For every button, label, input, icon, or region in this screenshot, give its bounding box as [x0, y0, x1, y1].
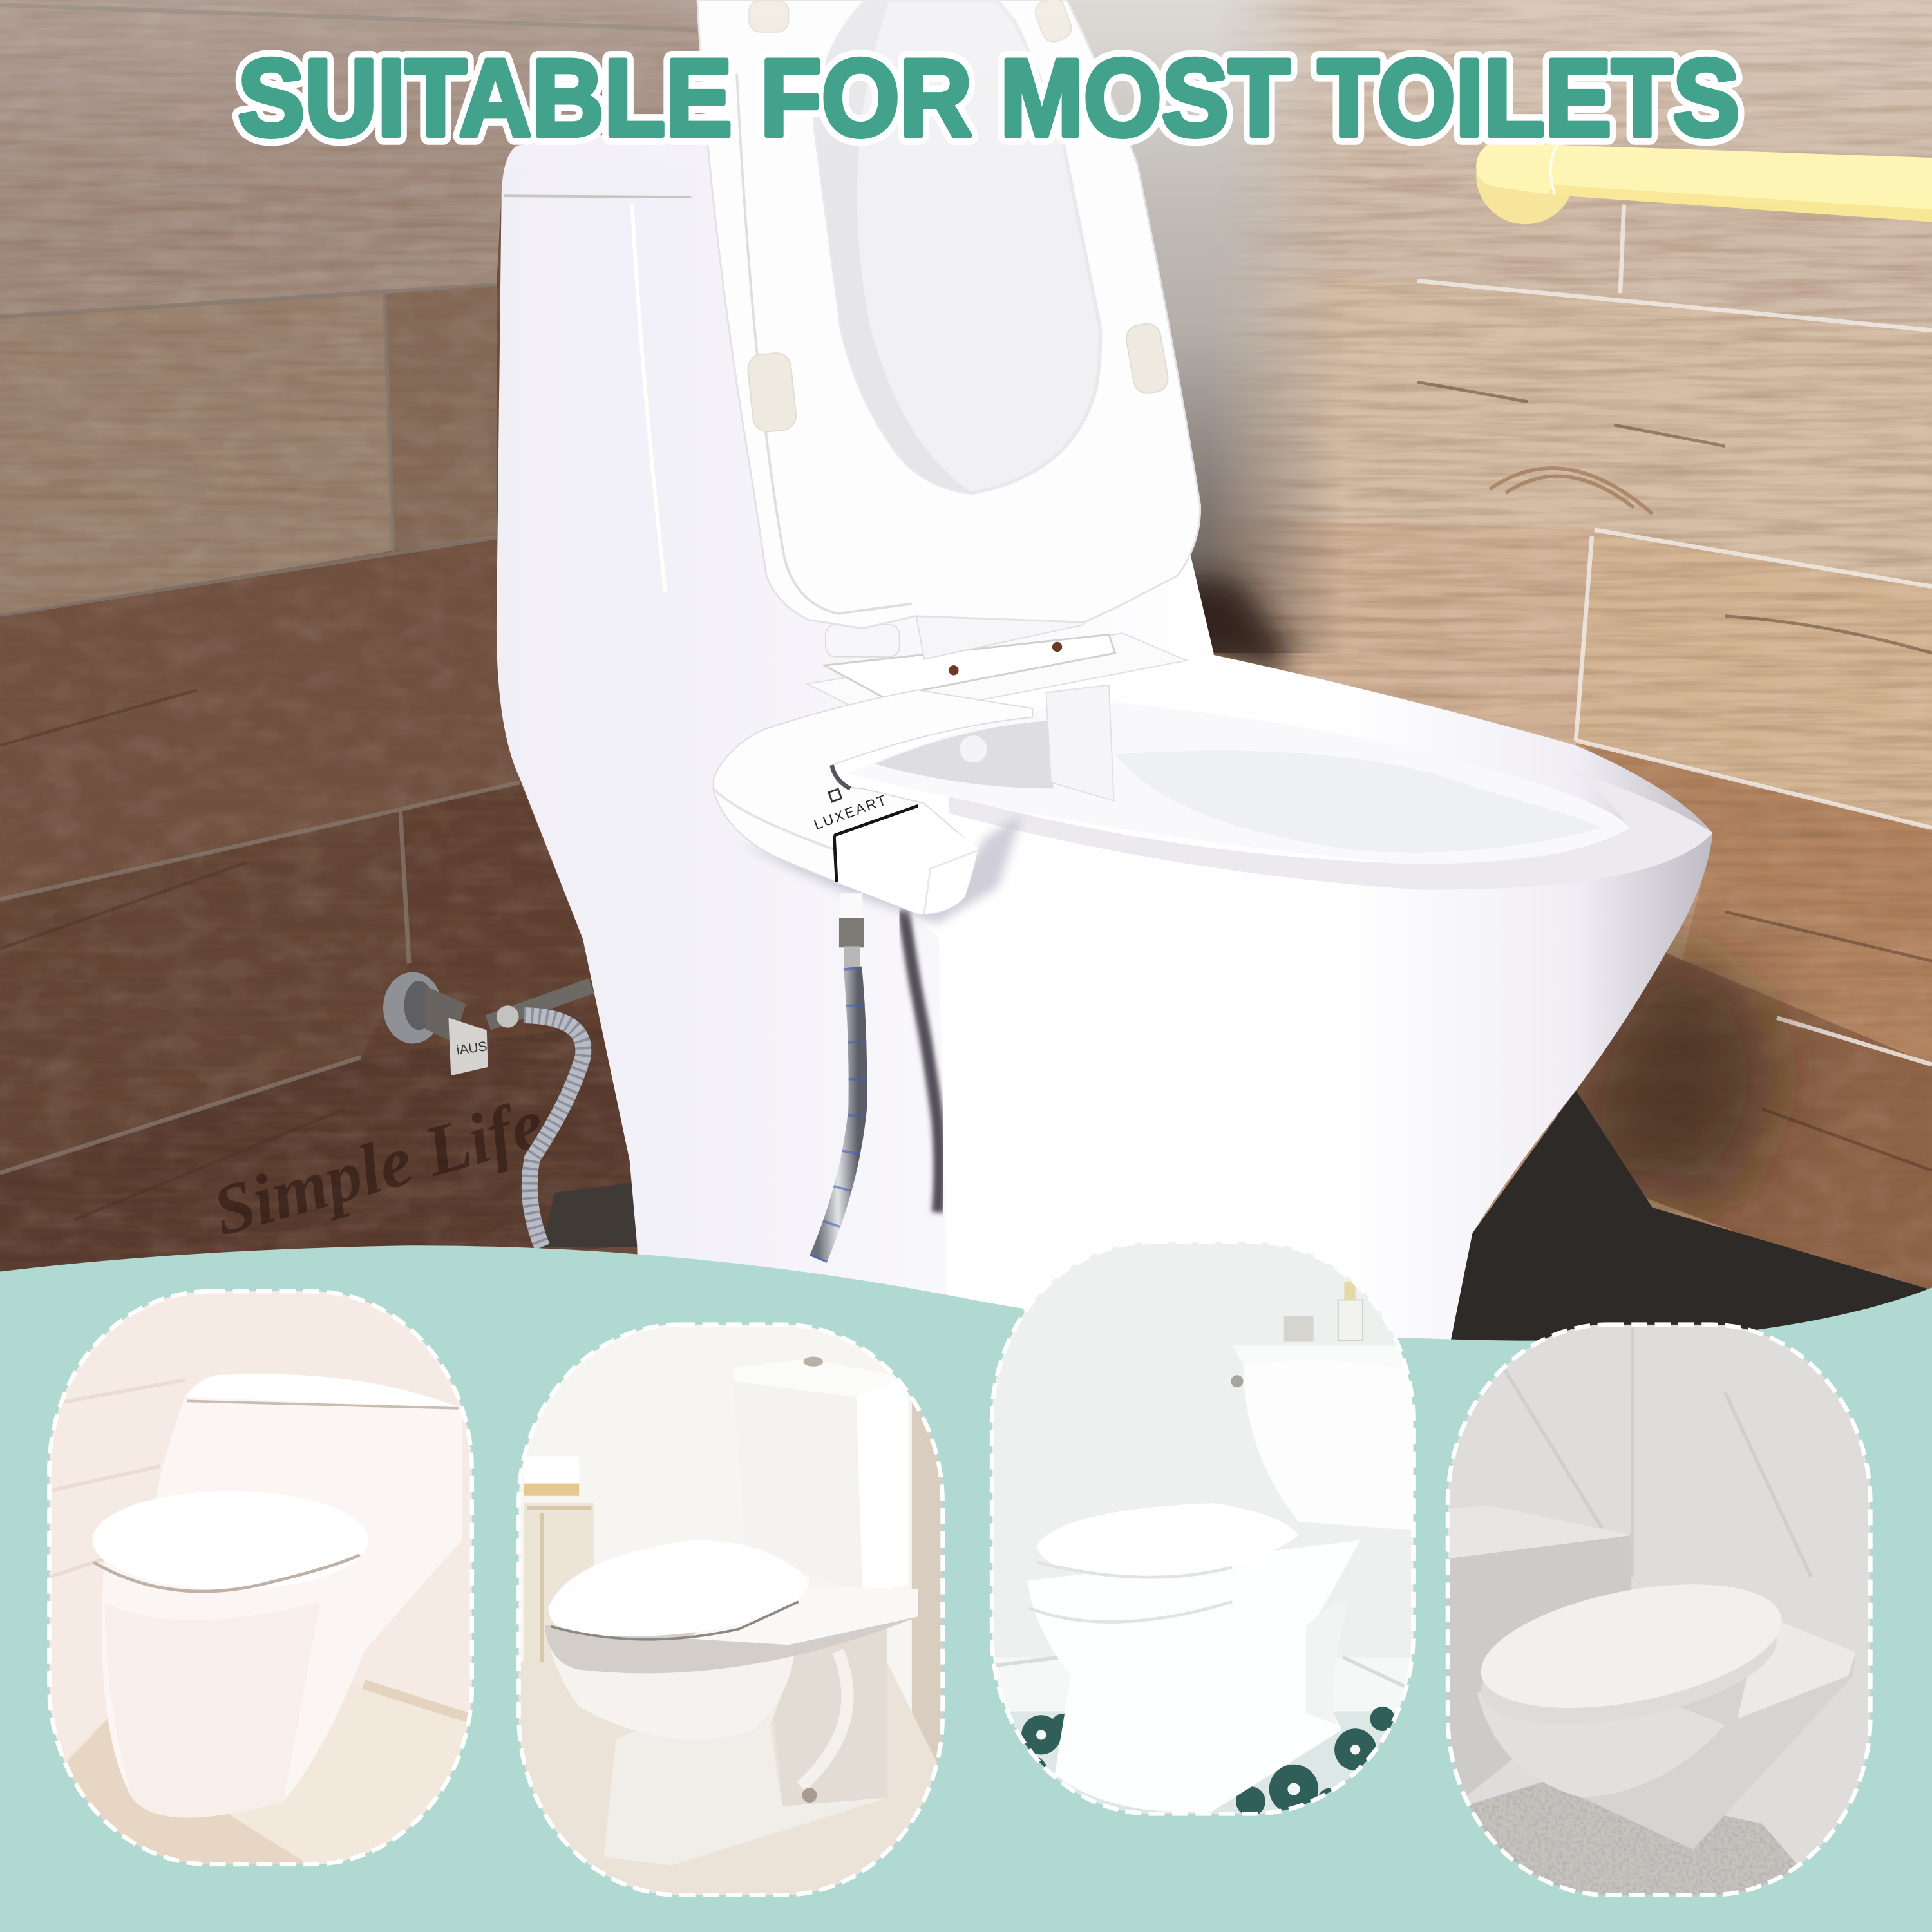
- mint wave panel: [0, 1245, 1932, 1932]
- bidet hose: [818, 893, 864, 1259]
- wall-hung bowl: [1477, 1624, 1855, 1850]
- seat lid: [548, 1540, 810, 1636]
- bidet control box: [834, 806, 978, 914]
- seat bumpers: [746, 0, 1170, 433]
- yellow grab rail: [1476, 126, 1932, 224]
- front rim shading: [949, 770, 1712, 890]
- back of bowl: [764, 1616, 887, 1806]
- tank: [733, 1378, 908, 1595]
- bowl and foot: [1028, 1540, 1360, 1812]
- bidet brand: LUXEART: [811, 791, 890, 833]
- panel: wall-hung toilet: [1448, 1325, 1870, 1897]
- water valve: iAUS: [455, 1039, 488, 1058]
- bowl pedestal: [604, 1676, 887, 1866]
- seat opening: [815, 0, 1101, 493]
- seat lid: [92, 1491, 368, 1589]
- raised seat lid: [697, 0, 1200, 629]
- bidet brand: [806, 775, 890, 833]
- title: SUITABLE FOR MOST TOILETS: [238, 37, 1740, 159]
- speckled floor: [1448, 1774, 1830, 1897]
- rim and deck: [545, 1589, 918, 1673]
- wall cracks: [0, 382, 1932, 1220]
- bowl opening: [848, 703, 1630, 864]
- wood light mottling: [0, 0, 1932, 1356]
- tank lid: [185, 1374, 459, 1407]
- main toilet: [497, 0, 1712, 1356]
- title: SUITABLE FOR MOST TOILETS: [238, 37, 1740, 159]
- grey shadow area behind raised lid: [1068, 0, 1334, 653]
- bidet shadow streak: [903, 909, 940, 1213]
- wall text: Simple Life: Simple Life: [205, 1083, 553, 1251]
- bowl exterior: [813, 634, 1712, 1356]
- wood grain texture: [0, 0, 1932, 1356]
- bidet drop shadow: [739, 813, 1023, 924]
- right wood wall planks: [1146, 0, 1932, 1356]
- left wood wall planks: [0, 0, 703, 1356]
- water valve: [383, 972, 591, 1075]
- photo: bathroom wood wall: [0, 0, 1932, 1356]
- shadow on wall behind bowl: [1565, 936, 1781, 1208]
- floor: [542, 1090, 1932, 1356]
- patterned floor tile: [992, 1707, 1414, 1816]
- tank: [1238, 1353, 1414, 1530]
- top haze: [0, 0, 1932, 209]
- dark gap above bowl: [1084, 579, 1287, 675]
- left supply hose: [524, 1016, 583, 1247]
- plank joints: [0, 5, 1932, 1173]
- seat lid: [1471, 1562, 1792, 1730]
- panel: close-coupled toilet on patterned floor: [992, 1242, 1414, 1816]
- panel: two-piece toilet with side tank: [518, 1325, 943, 1895]
- bidet attachment: [714, 690, 1032, 914]
- seat lid: [1036, 1503, 1299, 1577]
- toilet one-piece body: [102, 1397, 462, 1814]
- bench: [1448, 1508, 1631, 1811]
- stool and towels: [524, 1456, 594, 1662]
- toiletries: [1284, 1282, 1363, 1342]
- wall stamp: [1490, 468, 1653, 514]
- panel: one-piece toilet: [50, 1291, 472, 1864]
- hinge plates: [807, 574, 1186, 801]
- seat ring: [1472, 1586, 1786, 1745]
- tank and base body: [497, 0, 1232, 1356]
